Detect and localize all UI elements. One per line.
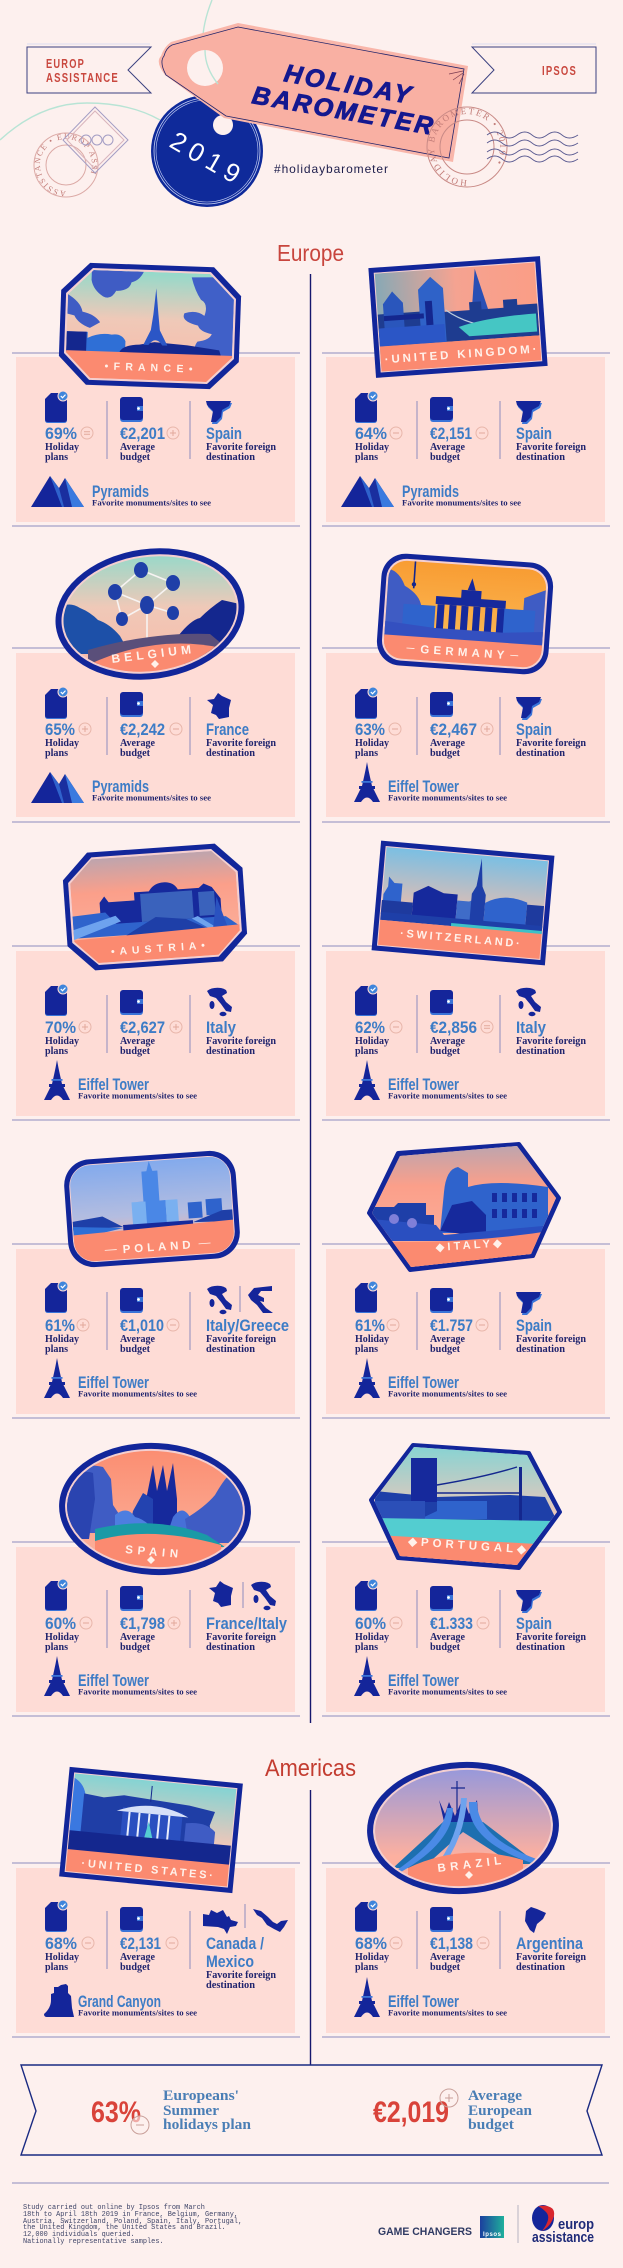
- sticker: Spain: SPAIN: [125, 1544, 179, 1561]
- panel: Germany stats: Average: [430, 738, 465, 749]
- panel: United States stats: Favorite foreign: [206, 1970, 276, 1981]
- panel: Belgium stats: [12, 648, 300, 822]
- methodology note: 12,000 individuals queried.: [23, 2231, 135, 2239]
- panel: Brazil stats: Eiffel Tower: [388, 1992, 459, 2011]
- panel: United Kingdom stats: Holiday: [355, 442, 390, 453]
- panel: United Kingdom stats: €2,151: [430, 424, 472, 443]
- panel: United States stats: [12, 1863, 300, 2037]
- panel: United States stats: budget: [120, 1962, 150, 1973]
- panel: Italy stats: [322, 1244, 610, 1418]
- panel: Germany stats: Eiffel Tower: [388, 777, 459, 796]
- sticker: France: • F R A N C E •: [104, 360, 193, 376]
- panel: Portugal stats: Holiday: [355, 1632, 390, 1643]
- title text: BAROMETER: [250, 81, 435, 141]
- panel: Brazil stats: budget: [430, 1962, 460, 1973]
- panel: Poland stats: Favorite monuments/sites to see: [78, 1388, 197, 1398]
- tag 2019 disc: [151, 95, 263, 207]
- panel: Switzerland stats: Holiday: [355, 1036, 390, 1047]
- panel: Italy stats: €1.757: [430, 1316, 473, 1335]
- ribbon: Ipsos: IPSOS: [542, 64, 577, 78]
- panel: Germany stats: destination: [516, 748, 565, 759]
- panel: United Kingdom stats: Favorite foreign: [516, 442, 586, 453]
- panel: Belgium stats: budget: [120, 748, 150, 759]
- text: Europeans summer holidays plan: [163, 2088, 252, 2133]
- panel: Germany stats: Favorite monuments/sites to see: [388, 792, 507, 802]
- sticker: Belgium: [56, 548, 244, 680]
- panel: Poland stats: Italy/Greece: [206, 1316, 289, 1335]
- panel: Brazil stats: Argentina: [516, 1934, 583, 1953]
- panel: United States stats: Grand Canyon: [78, 1992, 161, 2011]
- panel: Italy stats: destination: [516, 1344, 565, 1355]
- centre line: [310, 274, 312, 2065]
- panel: United Kingdom stats: plans: [355, 452, 378, 463]
- panel: Poland stats: budget: [120, 1344, 150, 1355]
- banner: European summary: [21, 2065, 602, 2155]
- stamp: Holiday Barometer and waves: HOLIDAY BAROMETER • 2019 •: [428, 108, 506, 186]
- panel: France stats: destination: [206, 452, 255, 463]
- text: Average European budget: [468, 2088, 533, 2133]
- panel: Spain stats: France/Italy: [206, 1614, 287, 1633]
- panel: Spain stats: plans: [45, 1642, 68, 1653]
- panel: Belgium stats: France: [206, 720, 249, 739]
- panel: Spain stats: destination: [206, 1642, 255, 1653]
- panel: Austria stats: destination: [206, 1046, 255, 1057]
- footer rule: [12, 2182, 609, 2184]
- panel: Switzerland stats: Favorite monuments/sites to see: [388, 1090, 507, 1100]
- panel: Germany stats: €2,467: [430, 720, 477, 739]
- sticker: Switzerland: ·SWITZERLAND·: [400, 928, 520, 950]
- sticker: Germany: GERMANY: [420, 644, 505, 662]
- sticker: Austria: • A U S T R I A •: [111, 940, 206, 958]
- sticker: Brazil: BRAZIL: [437, 1855, 502, 1875]
- panel: Spain stats: Average: [120, 1632, 155, 1643]
- panel: Belgium stats: Favorite foreign: [206, 738, 276, 749]
- panel: Austria stats: Italy: [206, 1018, 236, 1037]
- panel: France stats: Holiday: [45, 442, 80, 453]
- panel: Belgium stats: Average: [120, 738, 155, 749]
- sticker: Italy: ◆ITALY◆: [434, 1237, 503, 1254]
- panel: Austria stats: Favorite foreign: [206, 1036, 276, 1047]
- panel: Germany stats: plans: [355, 748, 378, 759]
- tag 2019 disc: 2019: [165, 125, 246, 189]
- panel: Portugal stats: budget: [430, 1642, 460, 1653]
- panel: United States stats: destination: [206, 1980, 255, 1991]
- logo: Game Changers Ipsos: GAME CHANGERS: [378, 2226, 472, 2238]
- panel: United Kingdom stats: Average: [430, 442, 465, 453]
- panel: Brazil stats: Holiday: [355, 1952, 390, 1963]
- methodology note: Nationally representative samples.: [23, 2238, 164, 2246]
- methodology note: Austria, Switzerland, Poland, Spain, Italy, Portugal,: [23, 2218, 242, 2226]
- logo: Game Changers Ipsos: Ipsos: [483, 2232, 502, 2238]
- panel: Poland stats: destination: [206, 1344, 255, 1355]
- panel: Poland stats: Eiffel Tower: [78, 1373, 149, 1392]
- methodology note: [23, 2204, 242, 2246]
- panel: Italy stats: Favorite foreign: [516, 1334, 586, 1345]
- panel: Switzerland stats: destination: [516, 1046, 565, 1057]
- panel: Belgium stats: Pyramids: [92, 777, 149, 796]
- panel: Austria stats: Eiffel Tower: [78, 1075, 149, 1094]
- panel: United Kingdom stats: Spain: [516, 424, 552, 443]
- ribbon: Europ Assistance: [27, 44, 151, 93]
- sticker: Poland: [62, 1149, 242, 1269]
- panel: France stats: budget: [120, 452, 150, 463]
- panel: Switzerland stats: [322, 946, 610, 1120]
- panel: Germany stats: 63%: [355, 720, 385, 739]
- panel: Poland stats: Holiday: [45, 1334, 80, 1345]
- panel: Austria stats: Average: [120, 1036, 155, 1047]
- panel: Spain stats: Eiffel Tower: [78, 1671, 149, 1690]
- luggage tag title: [159, 23, 468, 162]
- panel: Switzerland stats: €2,856: [430, 1018, 477, 1037]
- panel: United States stats: Holiday: [45, 1952, 80, 1963]
- panel: Brazil stats: Favorite monuments/sites to see: [388, 2008, 507, 2018]
- sticker: Poland: POLAND: [122, 1239, 191, 1256]
- panel: Austria stats: Favorite monuments/sites to see: [78, 1090, 197, 1100]
- panel: United Kingdom stats: [322, 353, 610, 526]
- panel: Spain stats: budget: [120, 1642, 150, 1653]
- sticker: United States: [59, 1767, 243, 1893]
- sticker: Portugal: ◆PORTUGAL◆: [407, 1536, 527, 1556]
- panel: Poland stats: 61%: [45, 1316, 75, 1335]
- panel: Brazil stats: Favorite foreign: [516, 1952, 586, 1963]
- panel: Portugal stats: €1.333: [430, 1614, 473, 1633]
- panel: Brazil stats: destination: [516, 1962, 565, 1973]
- sticker: United States: ·UNITED STATES·: [81, 1858, 213, 1882]
- panel: Germany stats: Holiday: [355, 738, 390, 749]
- panel: Switzerland stats: Average: [430, 1036, 465, 1047]
- hashtag: #holidaybarometer: [274, 162, 388, 176]
- text: Average European budget: European: [468, 2103, 533, 2119]
- panel: Portugal stats: 60%: [355, 1614, 386, 1633]
- panel: Spain stats: Favorite foreign: [206, 1632, 276, 1643]
- panel: United States stats: Average: [120, 1952, 155, 1963]
- panel: Italy stats: Spain: [516, 1316, 552, 1335]
- panel: Spain stats: Holiday: [45, 1632, 80, 1643]
- panel: Austria stats: 70%: [45, 1018, 76, 1037]
- panel: Italy stats: 61%: [355, 1316, 385, 1335]
- panel: Poland stats: Favorite foreign: [206, 1334, 276, 1345]
- methodology note: 18th to April 18th 2019 in France, Belgium, Germany,: [23, 2211, 238, 2219]
- ribbon: Europ Assistance: EUROP: [46, 57, 85, 71]
- text: Average European budget: budget: [468, 2117, 514, 2133]
- panel: United States stats: Canada /: [206, 1934, 264, 1953]
- panel: France stats: €2,201: [120, 424, 165, 443]
- panel: Poland stats: Average: [120, 1334, 155, 1345]
- panel: United Kingdom stats: 64%: [355, 424, 387, 443]
- panel: Switzerland stats: plans: [355, 1046, 378, 1057]
- panel: Poland stats: €1,010: [120, 1316, 164, 1335]
- panel: France stats: Spain: [206, 424, 242, 443]
- panel: France stats: Average: [120, 442, 155, 453]
- panel: Belgium stats: destination: [206, 748, 255, 759]
- text: Average European budget: Average: [468, 2088, 522, 2104]
- heading: Americas: Americas: [265, 1755, 356, 1782]
- panel: United Kingdom stats: Pyramids: [402, 482, 459, 501]
- panel: Switzerland stats: budget: [430, 1046, 460, 1057]
- panel: Germany stats: budget: [430, 748, 460, 759]
- sticker: Germany: [375, 552, 555, 676]
- methodology note: the United Kingdom, the United States and Brazil.: [23, 2224, 226, 2232]
- panel: United States stats: plans: [45, 1962, 68, 1973]
- text: Europeans summer holidays plan: Europeans': [163, 2088, 239, 2104]
- panel: Spain stats: [12, 1542, 300, 1716]
- panel: United Kingdom stats: destination: [516, 452, 565, 463]
- methodology note: Study carried out online by Ipsos from March: [23, 2204, 205, 2212]
- sticker: Portugal: [369, 1443, 562, 1570]
- panel: Austria stats: €2,627: [120, 1018, 165, 1037]
- stat: 2,019 euros: €2,019: [373, 2096, 449, 2129]
- panel: Brazil stats: €1,138: [430, 1934, 473, 1953]
- panel: Austria stats: Holiday: [45, 1036, 80, 1047]
- panel: Switzerland stats: Italy: [516, 1018, 546, 1037]
- panel: Brazil stats: Average: [430, 1952, 465, 1963]
- heading: Europe: Europe: [277, 240, 344, 266]
- panel: United Kingdom stats: Favorite monuments/sites to see: [402, 498, 521, 508]
- panel: Italy stats: Average: [430, 1334, 465, 1345]
- text: Europeans summer holidays plan: holidays plan: [163, 2117, 252, 2133]
- panel: United States stats: Mexico: [206, 1952, 254, 1971]
- panel: Germany stats: Favorite foreign: [516, 738, 586, 749]
- panel: Portugal stats: [322, 1542, 610, 1716]
- sticker: Spain: [59, 1442, 251, 1576]
- panel: Austria stats: plans: [45, 1046, 68, 1057]
- title text: HOLIDAY: [282, 59, 415, 110]
- sticker: Brazil: [367, 1762, 559, 1894]
- panel: Poland stats: plans: [45, 1344, 68, 1355]
- panel: Austria stats: budget: [120, 1046, 150, 1057]
- logo: Europ Assistance: [532, 2205, 594, 2246]
- panel: Austria stats: [12, 946, 300, 1120]
- panel: France stats: plans: [45, 452, 68, 463]
- panel: Switzerland stats: Favorite foreign: [516, 1036, 586, 1047]
- panel: Portugal stats: Average: [430, 1632, 465, 1643]
- panel: United States stats: Favorite monuments/sites to see: [78, 2008, 197, 2018]
- panel: Portugal stats: Eiffel Tower: [388, 1671, 459, 1690]
- panel: United States stats: 68%: [45, 1934, 77, 1953]
- sticker: Austria: [61, 841, 249, 973]
- sticker: Italy: [364, 1137, 564, 1277]
- ribbon: Europ Assistance: ASSISTANCE: [46, 71, 119, 85]
- panel: Poland stats: [12, 1244, 300, 1418]
- panel: Brazil stats: 68%: [355, 1934, 387, 1953]
- panel: Italy stats: Eiffel Tower: [388, 1373, 459, 1392]
- stamp: Europ Assistance: ASSISTANCE • EUROP ASSI: [34, 134, 98, 196]
- stamp: Holiday Barometer and waves: [426, 106, 578, 188]
- panel: Portugal stats: Favorite monuments/sites to see: [388, 1686, 507, 1696]
- panel: Italy stats: Favorite monuments/sites to see: [388, 1388, 507, 1398]
- panel: Switzerland stats: Eiffel Tower: [388, 1075, 459, 1094]
- sticker: Switzerland: [371, 841, 554, 966]
- panel: Germany stats: [322, 648, 610, 822]
- panel: Spain stats: €1,798: [120, 1614, 165, 1633]
- sticker: France: [58, 262, 242, 390]
- panel: Brazil stats: [322, 1863, 610, 2037]
- text: Europeans summer holidays plan: Summer: [163, 2103, 219, 2119]
- panel: United States stats: €2,131: [120, 1934, 161, 1953]
- panel: France stats: 69%: [45, 424, 77, 443]
- logo: Europ Assistance: assistance: [532, 2229, 594, 2246]
- panel: France stats: Favorite monuments/sites to see: [92, 498, 211, 508]
- panel: Portugal stats: Favorite foreign: [516, 1632, 586, 1643]
- panel: Italy stats: plans: [355, 1344, 378, 1355]
- panel: Spain stats: Favorite monuments/sites to see: [78, 1686, 197, 1696]
- panel: Italy stats: budget: [430, 1344, 460, 1355]
- panel: Italy stats: Holiday: [355, 1334, 390, 1345]
- panel: France stats: Favorite foreign: [206, 442, 276, 453]
- logo: Europ Assistance: europ: [558, 2216, 594, 2233]
- panel: Portugal stats: plans: [355, 1642, 378, 1653]
- stat: 63 percent: 63%: [91, 2096, 141, 2129]
- panel: Portugal stats: Spain: [516, 1614, 552, 1633]
- sticker: United Kingdom: [368, 256, 548, 378]
- panel: Belgium stats: Holiday: [45, 738, 80, 749]
- panel: United Kingdom stats: budget: [430, 452, 460, 463]
- decorative arcs: [0, 0, 218, 140]
- panel: Switzerland stats: 62%: [355, 1018, 385, 1037]
- stamp: Europ Assistance: [34, 106, 128, 198]
- panel: Belgium stats: €2,242: [120, 720, 165, 739]
- panel: Portugal stats: destination: [516, 1642, 565, 1653]
- panel: Belgium stats: 65%: [45, 720, 75, 739]
- panel: France stats: Pyramids: [92, 482, 149, 501]
- logo: Game Changers Ipsos: [378, 2216, 504, 2238]
- panel: Brazil stats: plans: [355, 1962, 378, 1973]
- panel: France stats: [12, 353, 300, 526]
- panel: Spain stats: 60%: [45, 1614, 76, 1633]
- panel: Belgium stats: Favorite monuments/sites to see: [92, 792, 211, 802]
- panel: Germany stats: Spain: [516, 720, 552, 739]
- ribbon: Ipsos: [472, 44, 596, 93]
- sticker: Belgium: BELGIUM: [111, 642, 192, 666]
- sticker: United Kingdom: ·UNITED KINGDOM·: [384, 344, 537, 366]
- panel: Belgium stats: plans: [45, 748, 68, 759]
